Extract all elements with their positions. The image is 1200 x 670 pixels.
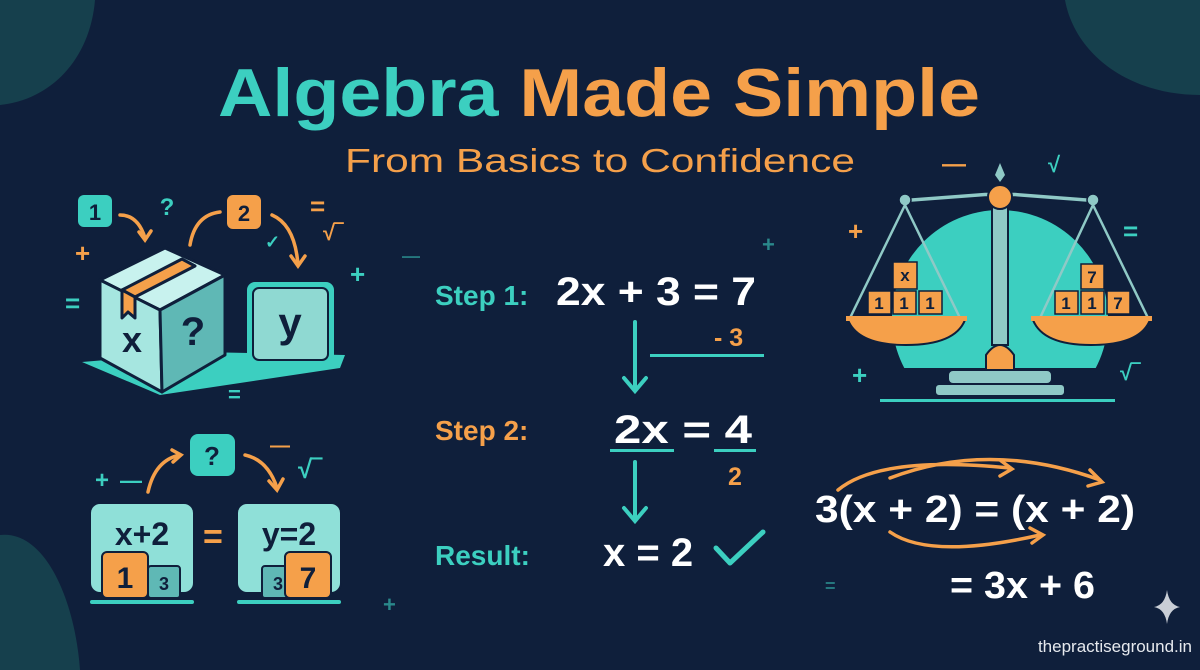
panel: steps: Result: xyxy=(435,540,530,571)
panel: balance scale: √ xyxy=(1048,152,1061,177)
panel: steps: Step 2: xyxy=(435,415,528,446)
panel: balance scale: 1 xyxy=(925,294,935,313)
panel: equation tiles: x+2 xyxy=(115,516,169,552)
strings xyxy=(850,205,1148,318)
panel: equation tiles: — xyxy=(120,468,142,493)
panel: balance scale xyxy=(846,151,1152,438)
panel: balance scale: 7 xyxy=(1087,268,1097,287)
icon: sparkle xyxy=(1154,590,1180,624)
panel: equation tiles: — xyxy=(270,435,290,457)
panel: box and variable illustration: √‾ xyxy=(323,220,344,245)
panel: equation tiles: y=2 xyxy=(262,516,316,552)
panel: distributive property xyxy=(815,459,1135,607)
panel: balance scale: 1 xyxy=(874,294,884,313)
panel: box and variable illustration: x xyxy=(122,319,142,360)
badge 2 xyxy=(227,195,261,229)
text: — xyxy=(402,246,420,266)
panel: box and variable illustration: + xyxy=(350,259,365,289)
panel: steps: - 3 xyxy=(714,324,743,352)
text: + xyxy=(762,232,775,257)
panel: balance scale: √‾ xyxy=(1120,360,1141,385)
panel: steps xyxy=(435,270,764,575)
cube xyxy=(100,248,225,392)
text: + xyxy=(383,592,396,617)
panel: box and variable illustration: ? xyxy=(181,310,205,354)
panel: steps: 2 xyxy=(728,463,742,491)
panel: equation tiles: = xyxy=(203,518,223,556)
panel: balance scale: + xyxy=(852,360,867,390)
panel: equation tiles: 3 xyxy=(159,574,169,594)
panel: equation tiles: √‾ xyxy=(298,454,323,484)
panel: box and variable illustration: ✓ xyxy=(265,232,280,252)
y tile xyxy=(247,282,334,366)
panel: distributive property: = 3x + 6 xyxy=(950,565,1095,607)
panel: steps: 2x + 3 = 7 xyxy=(556,270,756,314)
arrow 1 xyxy=(624,322,646,391)
base platform xyxy=(82,352,345,395)
arrows xyxy=(120,212,305,266)
panel: box and variable illustration xyxy=(65,191,365,407)
panel: equation tiles: 7 xyxy=(300,562,316,595)
panel: equation tiles: 3 xyxy=(273,574,283,594)
panel: steps: 2x = 4 xyxy=(614,408,753,452)
panel: equation tiles: + xyxy=(95,467,109,494)
panel: balance scale: = xyxy=(1123,216,1138,246)
panel: distributive property: = xyxy=(825,576,836,596)
badge 1: 1 xyxy=(89,200,101,225)
footer url: thepractiseground.in xyxy=(1038,637,1192,656)
panel: box and variable illustration: = xyxy=(65,288,80,318)
badge 2: 2 xyxy=(238,201,250,226)
panel: box and variable illustration: ? xyxy=(160,194,174,221)
arrow 2 xyxy=(624,462,646,521)
panel: balance scale: 7 xyxy=(1113,294,1123,313)
panel: equation tiles xyxy=(90,434,341,604)
panel: balance scale: + xyxy=(848,216,863,246)
title: Algebra Made Simple xyxy=(218,55,980,131)
panel: box and variable illustration: + xyxy=(75,238,90,268)
panel: box and variable illustration: = xyxy=(228,382,241,407)
icon: check xyxy=(716,532,763,563)
beam xyxy=(905,192,1093,203)
panel: box and variable illustration: = xyxy=(310,191,325,221)
panel: balance scale: 1 xyxy=(899,294,909,313)
panel: balance scale: 1 xyxy=(1061,294,1071,313)
y tile: y xyxy=(278,299,302,346)
panel: steps: Step 1: xyxy=(435,280,528,311)
panel: balance scale: 1 xyxy=(1087,294,1097,313)
left pan xyxy=(848,320,965,345)
panel: equation tiles: 1 xyxy=(117,562,133,595)
panel: balance scale: x xyxy=(900,266,910,285)
panel: steps: x = 2 xyxy=(603,531,693,575)
panel: distributive property: 3(x + 2) = (x + 2) xyxy=(815,489,1135,531)
panel: balance scale: — xyxy=(942,151,966,178)
right pan xyxy=(1033,320,1150,345)
badge 1 xyxy=(78,195,112,227)
panel: equation tiles: ? xyxy=(204,441,220,471)
subtitle: From Basics to Confidence xyxy=(345,142,855,179)
